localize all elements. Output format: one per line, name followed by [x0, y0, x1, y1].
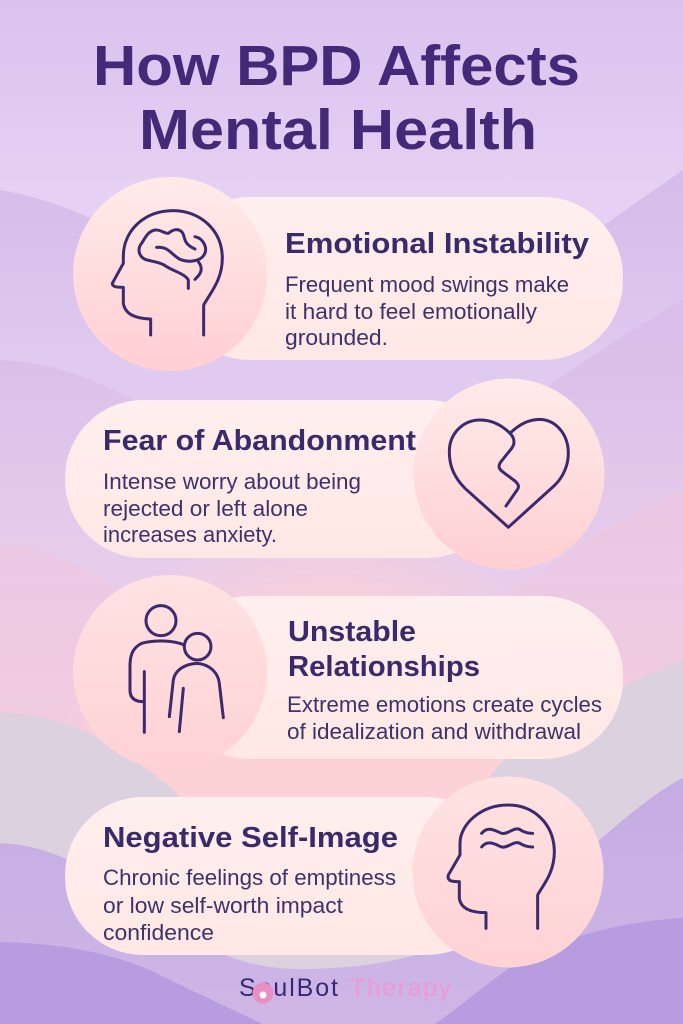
heading: Fear of Abandonment — [103, 425, 416, 457]
panel: fear of abandonment — [65, 378, 604, 570]
heading: Negative Self-Image — [103, 822, 398, 854]
heading: Emotional Instability — [285, 228, 589, 260]
body text: confidence — [103, 920, 214, 945]
heading — [288, 616, 480, 683]
body text — [103, 469, 361, 547]
icon: broken heart — [414, 378, 604, 570]
body text — [287, 692, 602, 744]
heading: Unstable — [288, 616, 416, 648]
panel: emotional instability — [73, 177, 623, 371]
body text — [285, 272, 569, 350]
logo: Therapy — [350, 974, 452, 1002]
body text: increases anxiety. — [103, 522, 277, 547]
body text: Extreme emotions create cycles — [287, 692, 602, 717]
body text: it hard to feel emotionally — [285, 299, 538, 324]
icon: brain with heart — [252, 982, 274, 1004]
body text: Intense worry about being — [103, 469, 361, 494]
logo: SoulBot — [239, 974, 338, 1002]
body text: grounded. — [285, 325, 388, 350]
panel: unstable relationships — [73, 575, 623, 769]
body text — [103, 865, 396, 945]
heading: Relationships — [288, 651, 480, 683]
icon: head with waves — [412, 776, 604, 968]
icon: two people — [73, 575, 267, 769]
body text: Chronic feelings of emptiness — [103, 865, 396, 890]
title: How BPD Affects — [93, 34, 580, 98]
body text: rejected or left alone — [103, 496, 308, 521]
body text: or low self-worth impact — [103, 893, 344, 918]
title: Mental Health — [139, 98, 537, 162]
title — [93, 34, 580, 162]
logo — [239, 974, 452, 1004]
icon: head with brain — [73, 177, 267, 371]
body text: Frequent mood swings make — [285, 272, 569, 297]
body text: of idealization and withdrawal — [287, 719, 581, 744]
panel: negative self-image — [65, 776, 604, 968]
